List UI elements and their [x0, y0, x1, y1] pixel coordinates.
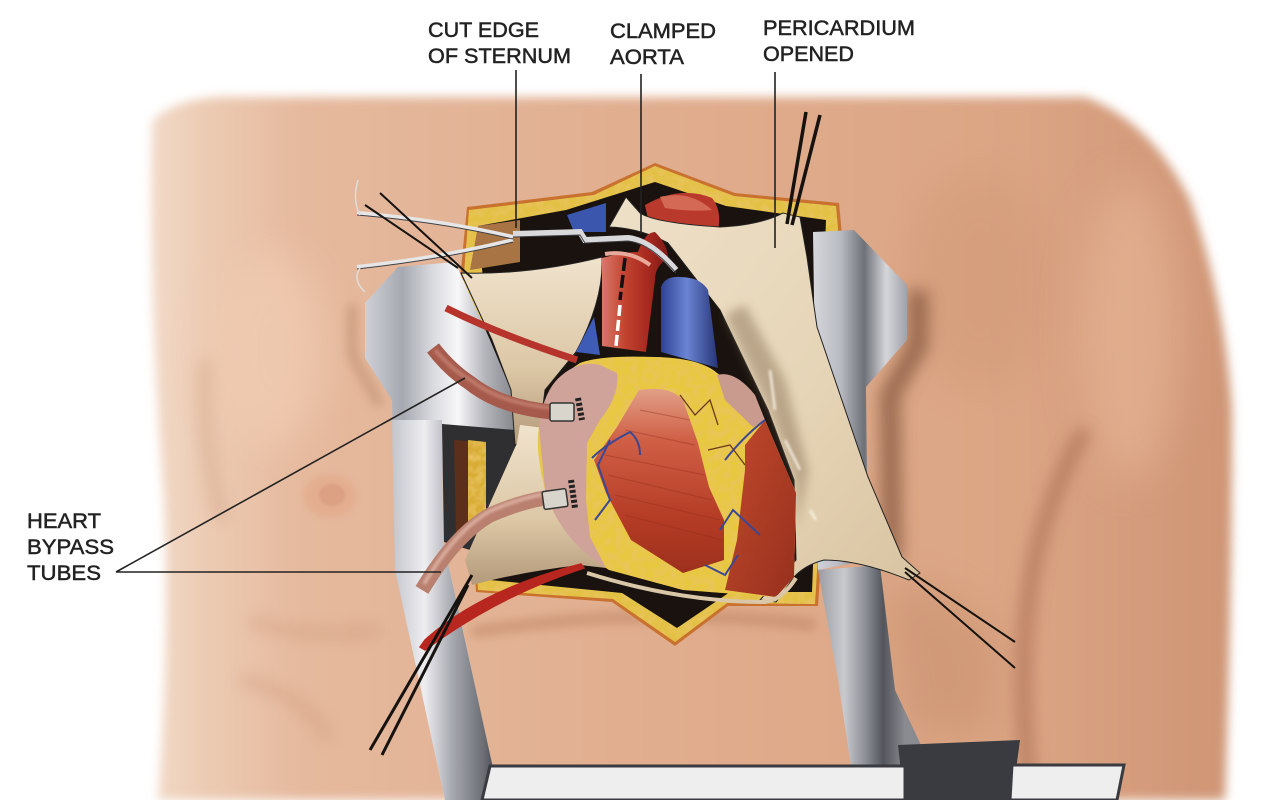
- icon: bypass tube lower red: [420, 564, 584, 650]
- icon: heart: [538, 357, 796, 597]
- label: cut edge of sternum: OF STERNUM: [428, 43, 571, 68]
- icon: small blue vessel: [576, 317, 600, 355]
- label: cut edge of sternum: [428, 17, 571, 228]
- icon: bypass tube lower: [422, 480, 575, 590]
- icon: bypass tube upper red: [446, 308, 577, 360]
- icon: clamped aorta: [602, 232, 668, 352]
- panel: pericardium left lower: [465, 425, 606, 585]
- icon: sutures: [365, 112, 1015, 755]
- label: clamped aorta: AORTA: [610, 44, 685, 69]
- icon: nipple: [304, 474, 356, 518]
- icon: aortic arch and blue vessel behind: [567, 193, 719, 232]
- label: heart bypass tubes: HEART: [27, 508, 101, 533]
- label: clamped aorta: CLAMPED: [610, 18, 716, 43]
- icon: clamp: [355, 180, 676, 292]
- label: heart bypass tubes: TUBES: [27, 560, 101, 585]
- panel: pericardium right: [609, 197, 920, 602]
- label: pericardium opened: PERICARDIUM: [763, 15, 915, 40]
- panel: lower retractor bar: [482, 740, 1124, 800]
- label: pericardium opened: OPENED: [763, 41, 854, 66]
- label: heart bypass tubes: [27, 378, 465, 585]
- label: cut edge of sternum: CUT EDGE: [428, 17, 539, 42]
- label: pericardium opened: [763, 15, 915, 248]
- icon: bypass tube middle: [433, 348, 582, 421]
- panel: left retractor: [365, 262, 515, 800]
- panel: pericardium left upper: [461, 257, 602, 445]
- panel: torso: [151, 97, 1232, 800]
- label: clamped aorta: [610, 18, 716, 234]
- panel: right retractor: [813, 230, 921, 800]
- icon: pericardium edge bottom: [587, 573, 796, 602]
- label: heart bypass tubes: BYPASS: [27, 534, 114, 559]
- panel: chest incision: [458, 163, 842, 646]
- icon: blue vena cava: [661, 277, 718, 368]
